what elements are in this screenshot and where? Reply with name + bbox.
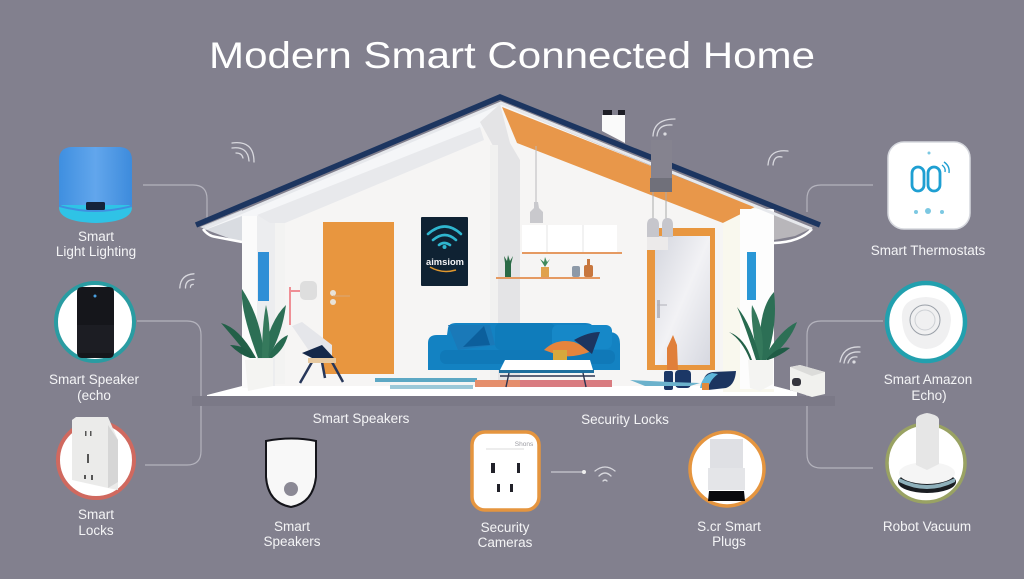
label: smart plugs: S.cr Smart [697,519,761,534]
label: smart plugs [697,519,761,549]
label: smart amazon echo: Smart Amazon [884,372,972,387]
bottom connector with dot [551,470,586,474]
wifi icon: left middle [177,271,199,293]
label: smart amazon echo: Echo) [911,388,947,403]
label: smart locks: Smart [78,507,114,522]
floor lamp [290,281,317,325]
blue wall panel right [747,252,756,300]
heading label: smart speakers: Smart Speakers [313,411,410,426]
wifi icon: bottom [595,467,615,481]
floor shadow band [192,396,835,406]
device: smart thermostat [888,142,970,229]
chair [292,322,343,383]
label: smart locks [78,507,114,538]
device: security camera socket: Shons [515,441,534,448]
label: smart speakers: Smart [274,519,310,534]
main door [323,222,394,374]
label: security cameras: Cameras [478,535,533,550]
left soffit and gutter [200,210,242,243]
right wall [723,207,774,392]
device: smart plug [690,432,764,506]
device: smart locks plug [58,417,134,498]
right soffit and gutter [774,215,812,243]
label: smart locks: Locks [78,523,114,538]
device: robot vacuum [887,413,965,502]
label: smart speaker echo: (echo [77,388,111,403]
house [196,97,825,397]
label: smart plugs: Plugs [712,534,746,549]
luggage and cushions [630,370,736,390]
device: smart lighting [59,147,132,223]
label: smart thermostats: Smart Thermostats [871,243,986,258]
heading label: security locks: Security Locks [581,412,669,427]
right plant [729,292,797,391]
device: security camera socket [472,432,539,510]
label: robot vacuum: Robot Vacuum [883,519,971,534]
rugs [375,378,612,389]
left column [242,212,285,388]
blue wall panel left [258,252,269,301]
label: security cameras: Security [481,520,530,535]
chimney [602,110,625,143]
wifi icon: right middle [840,347,860,363]
label: smart light lighting [56,229,136,259]
wifi icon: upper right [768,151,788,165]
shelf items [504,255,593,277]
orange vase [667,335,678,370]
pendant lamp left [530,146,543,223]
label: smart speaker echo: Smart Speaker [49,372,140,387]
left roof underside [205,104,500,230]
sofa [428,323,620,370]
title: Modern Smart Connected Home [209,35,815,76]
wifi icon: upper left [232,143,254,162]
label: smart light lighting: Light Lighting [56,244,136,259]
label: smart speaker echo [49,372,140,403]
device: smart speaker echo [56,283,134,361]
device: smart speaker shield [266,438,316,507]
coffee table [499,360,595,387]
wifi sign: aimsiom [426,257,464,268]
wifi icon: roof device [653,119,675,136]
orange ceiling [502,107,755,223]
wifi sign [421,217,468,286]
central column [480,104,520,386]
device: smart amazon echo [887,283,965,361]
router device [790,365,825,397]
shelves [496,252,622,279]
label: smart speakers [263,519,321,549]
right door [647,228,715,370]
label: smart light lighting: Smart [78,229,114,244]
floor slab [207,386,797,396]
cabinets [522,225,617,252]
cushions on sofa [544,332,600,360]
house walls [242,104,774,395]
roof line [196,97,820,225]
connector lines [137,185,883,468]
label: smart amazon echo [884,372,972,403]
pendant lamps right [647,192,673,250]
label: smart speakers: Speakers [263,534,321,549]
roof sensor box [650,140,672,192]
left plant [221,289,288,391]
label: security cameras [478,520,533,550]
